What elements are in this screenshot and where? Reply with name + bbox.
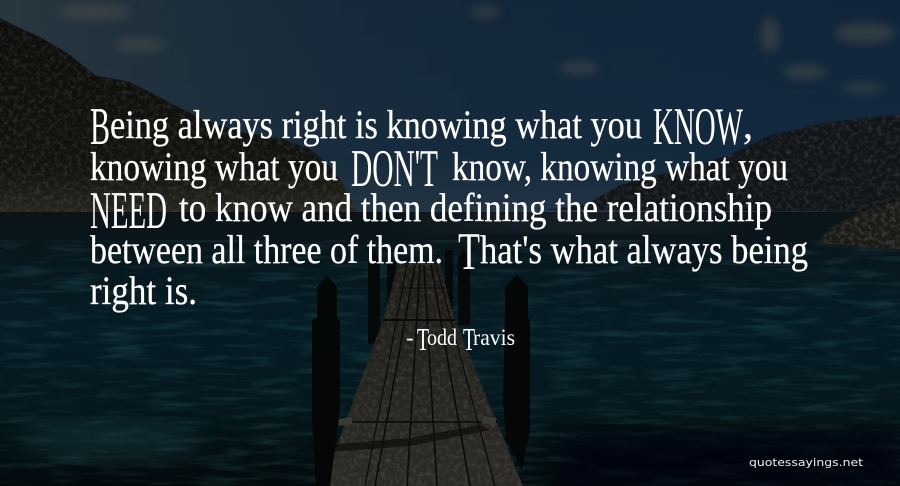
author attribution: - (406, 325, 414, 350)
plank lines (338, 265, 498, 486)
quote text: B (90, 98, 110, 156)
quote text: know, knowing what you (452, 144, 788, 189)
author attribution: T (417, 321, 429, 357)
quote text: knowing what you (90, 144, 338, 189)
dock posts, far (368, 249, 470, 345)
author attribution: T (463, 321, 475, 357)
watermark: quotessayings.net (749, 457, 863, 469)
left hillside (0, 18, 356, 212)
background: water (0, 212, 900, 486)
quote text: eing always right is knowing what you (110, 102, 642, 147)
quote text: DON'T (351, 140, 438, 198)
wooden dock (322, 264, 523, 486)
clouds (59, 5, 895, 93)
quote text: right is. (90, 268, 197, 313)
right hillside (545, 114, 900, 250)
author attribution: ravis (473, 325, 515, 350)
quote text: NEED (90, 182, 167, 240)
quote text: T (458, 223, 480, 281)
quote text: between all three of them. (90, 227, 443, 272)
quote text: KNOW (653, 98, 743, 156)
author attribution (406, 321, 515, 357)
quote text (90, 98, 808, 313)
quote text: , (743, 102, 753, 147)
quote text: hat's what always being (480, 227, 808, 272)
background: sky (0, 0, 900, 225)
quote text: to know and then defining the relationship (179, 185, 772, 230)
author attribution: odd (427, 325, 457, 350)
dock posts, near (312, 275, 530, 486)
